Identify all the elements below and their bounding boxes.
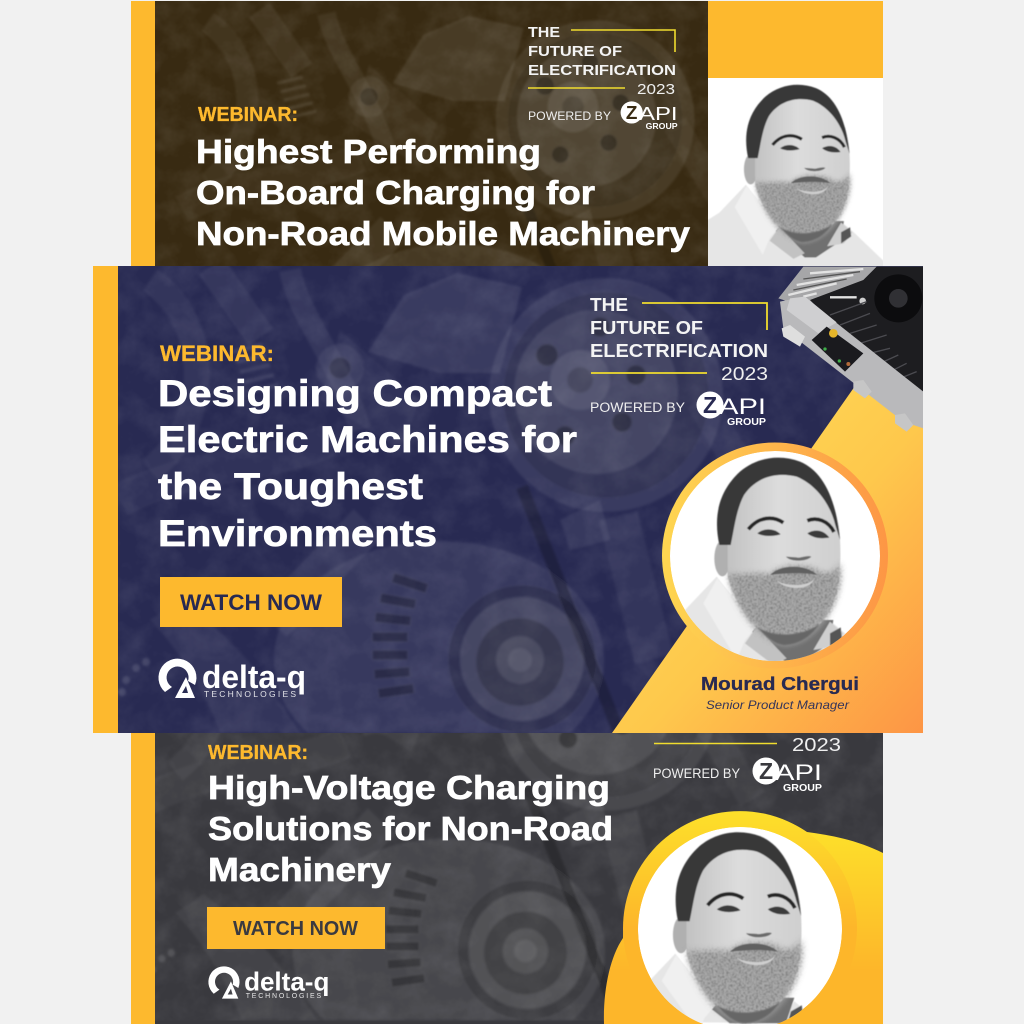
headline	[208, 769, 613, 888]
logo: Zapi Group: Z	[759, 758, 773, 784]
brown machinery background	[155, 1, 708, 266]
event lockup: 2023	[721, 364, 768, 384]
bottom banner: high-voltage charging	[131, 733, 883, 1024]
button: watch now	[207, 907, 385, 949]
logo: Zapi Group: GROUP	[783, 782, 822, 794]
event lockup: POWERED BY	[528, 111, 611, 123]
headline: Electric Machines for	[158, 419, 577, 460]
headline: High-Voltage Charging	[208, 769, 610, 806]
headline: the Toughest	[158, 466, 423, 507]
event lockup	[590, 295, 768, 415]
headline: Environments	[158, 513, 437, 554]
event lockup: ELECTRIFICATION	[528, 62, 676, 79]
logo: Zapi Group: GROUP	[646, 121, 678, 131]
event lockup: FUTURE OF	[590, 318, 703, 338]
photo ring	[662, 442, 888, 668]
webinar label: WEBINAR:	[160, 341, 274, 366]
headline: Non-Road Mobile Machinery	[196, 215, 691, 252]
event year and rule	[653, 735, 841, 781]
yellow corner block	[708, 1, 883, 78]
button: watch now	[160, 577, 342, 627]
logo: Zapi Group: API	[639, 104, 678, 124]
headline: Machinery	[208, 851, 392, 888]
event lockup: THE	[590, 295, 628, 315]
event lockup: THE	[528, 24, 560, 41]
headline: Highest Performing	[196, 133, 541, 170]
event lockup: POWERED BY	[590, 400, 685, 415]
logo: delta-q: TECHNOLOGIES	[246, 993, 322, 1000]
event lockup: 2023	[637, 81, 675, 98]
speaker photo	[670, 451, 880, 661]
speaker role: Senior Product Manager	[706, 698, 850, 712]
top banner: on-board charging	[131, 1, 883, 266]
logo: Zapi Group: Z	[703, 392, 717, 418]
logo: delta-q: TECHNOLOGIES	[204, 689, 296, 699]
speaker photo	[638, 827, 842, 1024]
product: delta-q charger	[778, 267, 923, 432]
webinar label: WEBINAR:	[198, 104, 298, 126]
headline: Designing Compact	[158, 373, 552, 414]
grey machinery background	[155, 733, 883, 1024]
event lockup: ELECTRIFICATION	[590, 341, 768, 361]
headline: On-Board Charging for	[196, 174, 595, 211]
headline	[158, 373, 577, 554]
webinar label: WEBINAR:	[208, 742, 308, 764]
logo: Zapi Group: API	[775, 760, 822, 785]
button: watch now: WATCH NOW	[180, 590, 322, 615]
headline	[196, 133, 691, 252]
speaker name: Mourad Chergui	[701, 673, 859, 694]
event year and rule: POWERED BY	[653, 766, 740, 781]
yellow diagonal panel	[612, 386, 923, 733]
event year and rule: 2023	[792, 735, 841, 755]
logo: Zapi Group	[752, 758, 822, 794]
accent stripe	[93, 266, 118, 733]
middle banner: compact electric machines	[60, 255, 930, 733]
photo ring	[623, 811, 857, 1024]
logo: Zapi Group	[621, 101, 678, 131]
event lockup	[528, 24, 676, 123]
navy machinery background	[60, 255, 930, 733]
logo: Zapi Group: GROUP	[727, 416, 766, 428]
event lockup: FUTURE OF	[528, 43, 622, 60]
logo: Zapi Group: Z	[626, 102, 637, 123]
logo: delta-q	[158, 659, 306, 699]
button: watch now: WATCH NOW	[233, 918, 358, 940]
yellow blob	[604, 812, 883, 1024]
logo: delta-q	[208, 966, 329, 1000]
speaker photo	[708, 78, 883, 266]
logo: delta-q: delta-q	[244, 966, 329, 996]
accent stripe	[131, 1, 155, 266]
accent stripe	[131, 733, 155, 1024]
headline: Solutions for Non-Road	[208, 810, 613, 847]
logo: Zapi Group: API	[719, 394, 766, 419]
logo: Zapi Group	[696, 392, 766, 428]
logo: delta-q: delta-q	[202, 659, 306, 695]
